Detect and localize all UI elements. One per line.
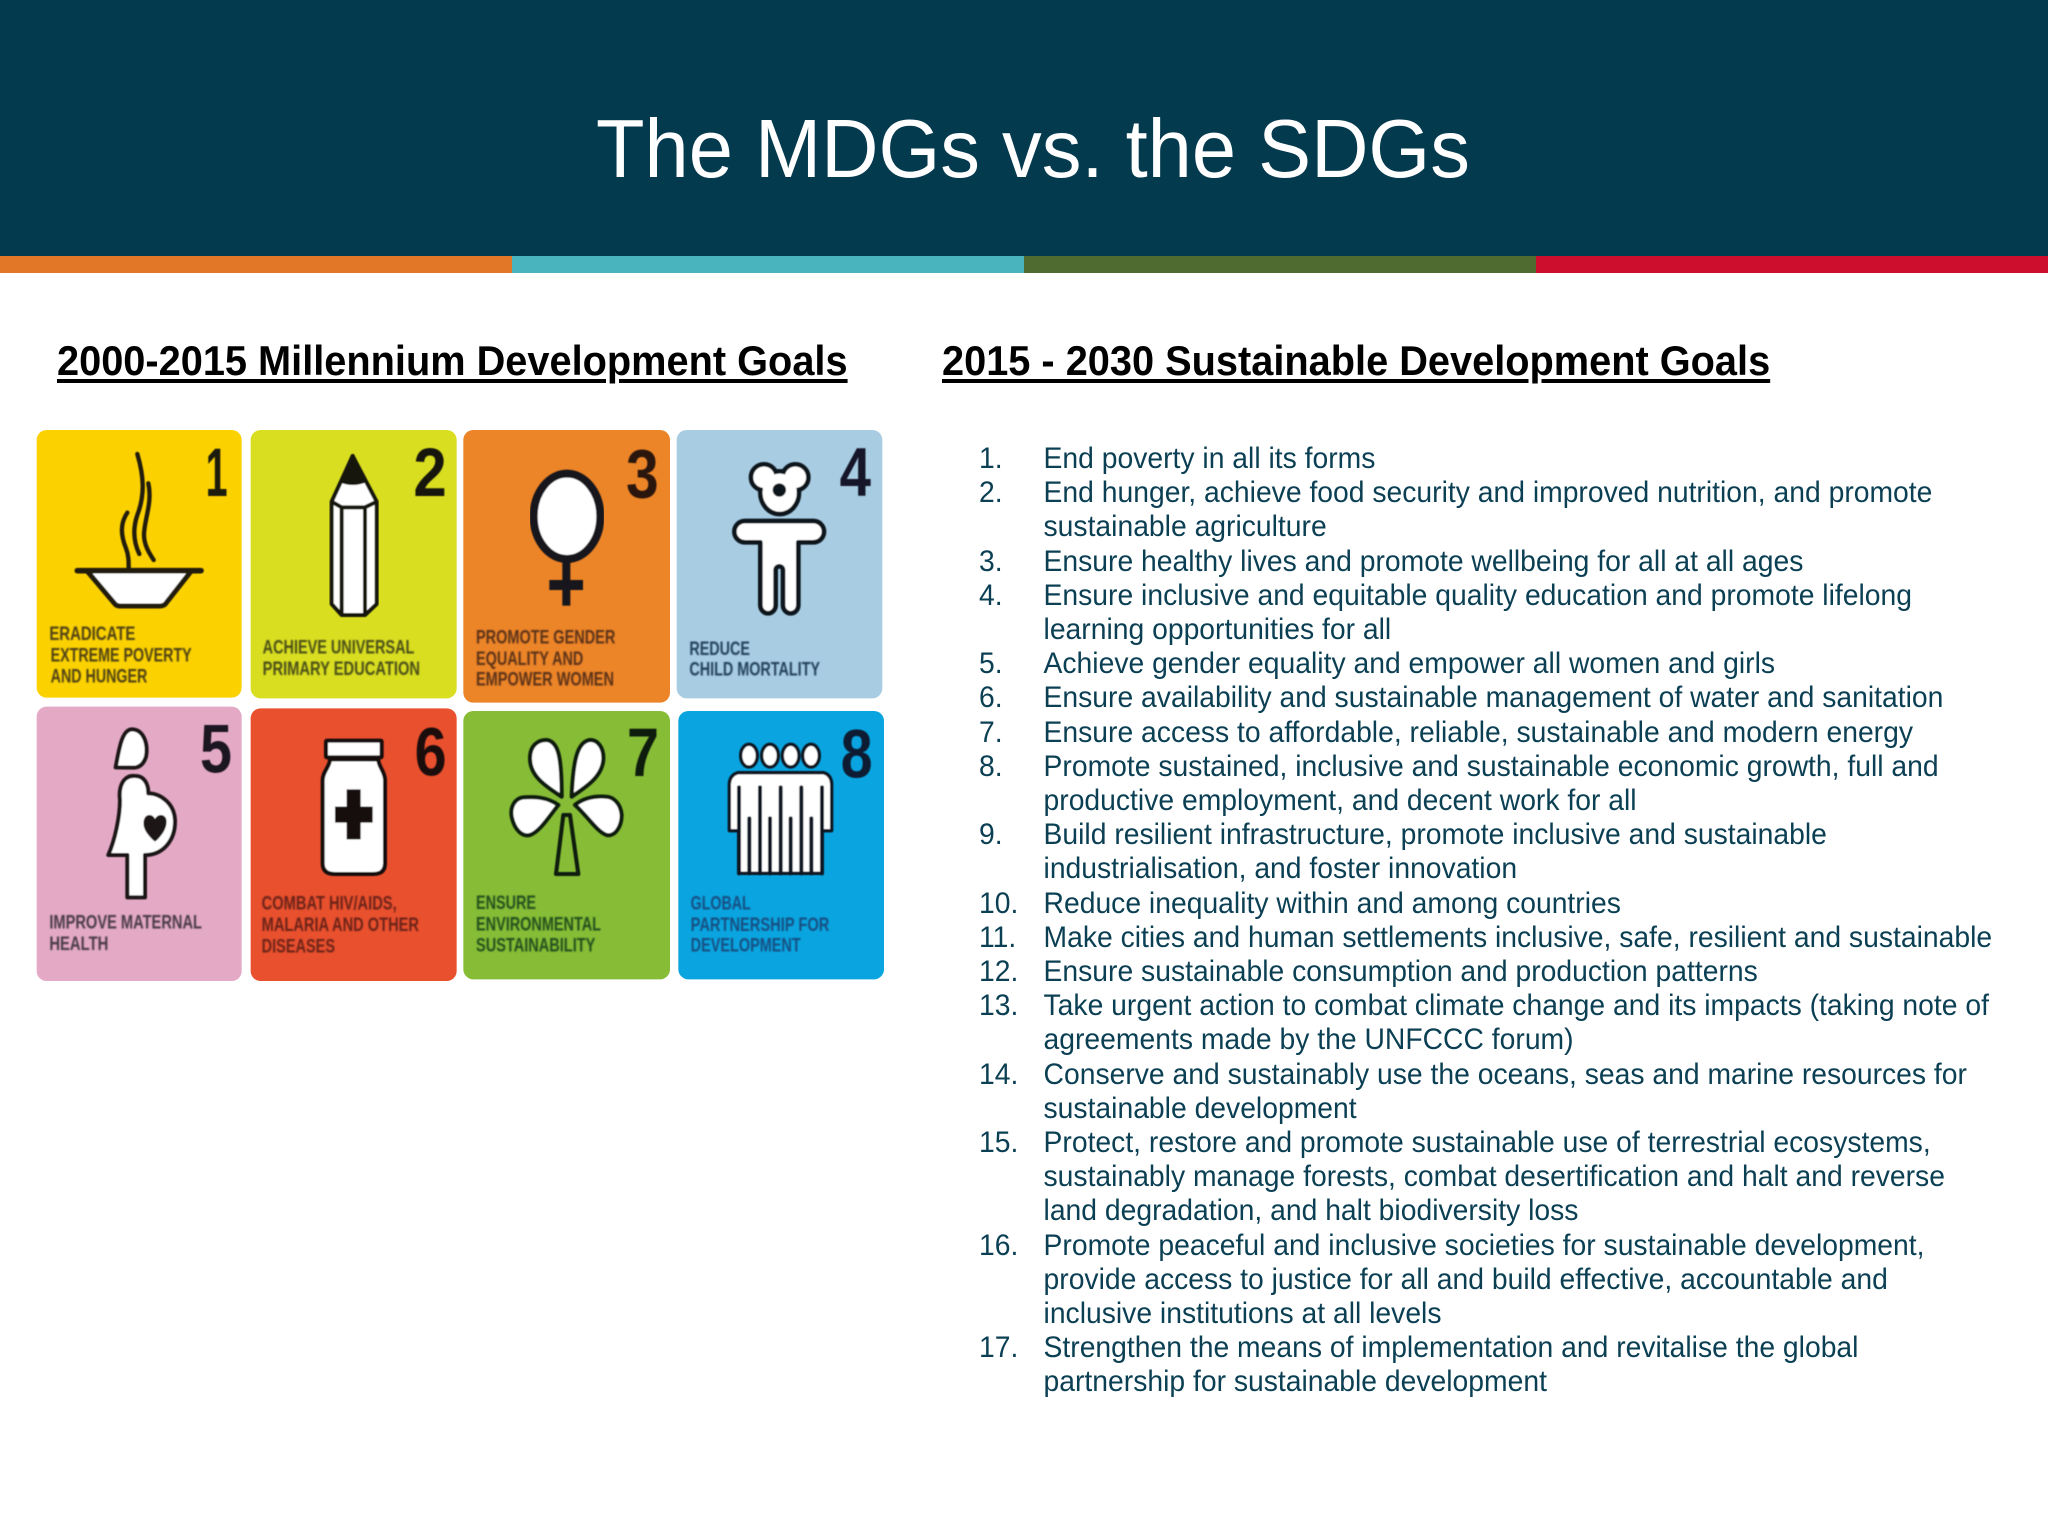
heading: Millennium Development Goals: 2000-2015 Millennium Development Goals	[57, 338, 848, 384]
MDG tile 3: gender equality	[463, 430, 670, 703]
label	[263, 637, 420, 680]
label: ERADICATE	[49, 624, 135, 645]
SDG numbered list: 16.	[979, 1229, 1018, 1262]
MDG tile 2: primary education	[251, 430, 457, 698]
SDG numbered list: 7.	[979, 716, 1003, 749]
SDG numbered list: Promote sustained, inclusive and sustainable economic growth, full and	[1044, 750, 1939, 783]
SDG numbered list: Take urgent action to combat climate change and its impacts (taking note of	[1044, 989, 1989, 1022]
SDG numbered list: 13.	[979, 989, 1018, 1022]
number 1: 1	[206, 435, 228, 511]
label: SUSTAINABILITY	[476, 936, 595, 957]
label: DISEASES	[262, 936, 335, 957]
SDG numbered list: 3.	[979, 545, 1003, 578]
SDG numbered list: industrialisation, and foster innovation	[1044, 852, 1517, 885]
SDG numbered list: partnership for sustainable development	[1044, 1365, 1547, 1398]
label: EXTREME POVERTY	[51, 646, 192, 667]
label	[262, 893, 419, 957]
header banner	[0, 0, 2048, 256]
label	[49, 912, 202, 955]
label: CHILD MORTALITY	[689, 660, 820, 681]
SDG numbered list: agreements made by the UNFCCC forum)	[1044, 1023, 1574, 1056]
icon: child figure	[734, 464, 824, 613]
SDG numbered list: 15.	[979, 1126, 1018, 1159]
SDG numbered list: Reduce inequality within and among countries	[1044, 887, 1621, 920]
SDG numbered list: 11.	[979, 921, 1016, 954]
SDG numbered list: 10.	[979, 887, 1018, 920]
icon: medicine jar	[323, 741, 385, 874]
label: HEALTH	[49, 934, 108, 955]
SDG numbered list: Achieve gender equality and empower all women and girls	[1044, 647, 1775, 680]
SDG numbered list: 9.	[979, 818, 1003, 851]
SDG numbered list: Ensure sustainable consumption and production patterns	[1044, 955, 1758, 988]
heading: Sustainable Development Goals: 2015 - 2030 Sustainable Development Goals	[942, 338, 1770, 384]
icon: steaming bowl	[77, 454, 201, 606]
label: EQUALITY AND	[476, 649, 583, 670]
SDG numbered list: land degradation, and halt biodiversity loss	[1044, 1194, 1578, 1227]
label: PARTNERSHIP FOR	[691, 915, 829, 936]
SDG numbered list: End hunger, achieve food security and improved nutrition, and promote	[1044, 476, 1932, 509]
colour stripe	[0, 256, 2048, 273]
number 4: 4	[840, 434, 871, 510]
MDG tile 1: eradicate poverty	[37, 430, 242, 698]
SDG numbered list: Ensure healthy lives and promote wellbeing for all at all ages	[1044, 545, 1803, 578]
label: PROMOTE GENDER	[476, 627, 615, 648]
SDG numbered list: 6.	[979, 681, 1003, 714]
label: GLOBAL	[691, 893, 751, 914]
SDG numbered list: learning opportunities for all	[1044, 613, 1391, 646]
SDG numbered list: Build resilient infrastructure, promote inclusive and sustainable	[1044, 818, 1827, 851]
SDG numbered list: 14.	[979, 1058, 1018, 1091]
SDG numbered list: sustainable development	[1044, 1092, 1357, 1125]
SDG numbered list: Strengthen the means of implementation and revitalise the global	[1044, 1331, 1858, 1364]
number 8: 8	[841, 717, 873, 793]
label: ENVIRONMENTAL	[476, 915, 601, 936]
number 7: 7	[627, 715, 659, 791]
label	[49, 624, 192, 688]
SDG numbered list: Ensure availability and sustainable management of water and sanitation	[1044, 681, 1943, 714]
label: ACHIEVE UNIVERSAL	[263, 637, 414, 658]
SDG numbered list: End poverty in all its forms	[1044, 442, 1375, 475]
SDG numbered list	[979, 442, 1992, 1398]
MDG tile 5: maternal health	[37, 707, 242, 981]
icon: female symbol	[534, 474, 600, 606]
label: ENSURE	[476, 893, 536, 914]
icon: group of people	[729, 744, 832, 873]
label	[476, 893, 601, 957]
label: PRIMARY EDUCATION	[263, 659, 420, 680]
SDG numbered list: 5.	[979, 647, 1003, 680]
SDG numbered list: 4.	[979, 579, 1003, 612]
label: REDUCE	[689, 639, 750, 660]
MDG tile 4: child mortality	[677, 430, 882, 698]
icon: pregnant woman	[108, 729, 175, 897]
number 5: 5	[200, 712, 232, 788]
SDG numbered list: sustainably manage forests, combat desertification and halt and reverse	[1044, 1160, 1945, 1193]
number 3: 3	[626, 437, 659, 513]
label: AND HUNGER	[51, 667, 147, 688]
SDG numbered list: productive employment, and decent work for all	[1044, 784, 1637, 817]
MDG tile 6: combat diseases	[251, 708, 457, 981]
label	[691, 893, 829, 957]
label: DEVELOPMENT	[691, 936, 801, 957]
SDG numbered list: Protect, restore and promote sustainable use of terrestrial ecosystems,	[1044, 1126, 1931, 1159]
SDG numbered list: 12.	[979, 955, 1018, 988]
SDG numbered list: 2.	[979, 476, 1003, 509]
label	[476, 627, 615, 691]
icon: pencil	[332, 456, 377, 615]
SDG numbered list: Make cities and human settlements inclusive, safe, resilient and sustainable	[1044, 921, 1992, 954]
number 2: 2	[413, 435, 447, 511]
number 6: 6	[415, 714, 447, 790]
SDG numbered list: Ensure inclusive and equitable quality education and promote lifelong	[1044, 579, 1912, 612]
label: MALARIA AND OTHER	[262, 915, 419, 936]
SDG numbered list: 8.	[979, 750, 1003, 783]
SDG numbered list: sustainable agriculture	[1044, 510, 1327, 543]
SDG numbered list: Promote peaceful and inclusive societies for sustainable development,	[1044, 1229, 1925, 1262]
label: COMBAT HIV/AIDS,	[262, 893, 397, 914]
SDG numbered list: inclusive institutions at all levels	[1044, 1297, 1442, 1330]
label	[689, 639, 820, 681]
icon: clover tree	[511, 740, 622, 874]
MDG tile 8: global partnership	[678, 711, 884, 979]
SDG numbered list: Ensure access to affordable, reliable, sustainable and modern energy	[1044, 716, 1913, 749]
SDG numbered list: 1.	[979, 442, 1003, 475]
label: IMPROVE MATERNAL	[49, 912, 202, 933]
title: The MDGs vs. the SDGs	[596, 102, 1469, 195]
SDG numbered list: 17.	[979, 1331, 1018, 1364]
SDG numbered list: Conserve and sustainably use the oceans, seas and marine resources for	[1044, 1058, 1967, 1091]
label: EMPOWER WOMEN	[476, 670, 614, 691]
MDG tile 7: environmental sustainability	[463, 711, 670, 979]
SDG numbered list: provide access to justice for all and build effective, accountable and	[1044, 1263, 1888, 1296]
